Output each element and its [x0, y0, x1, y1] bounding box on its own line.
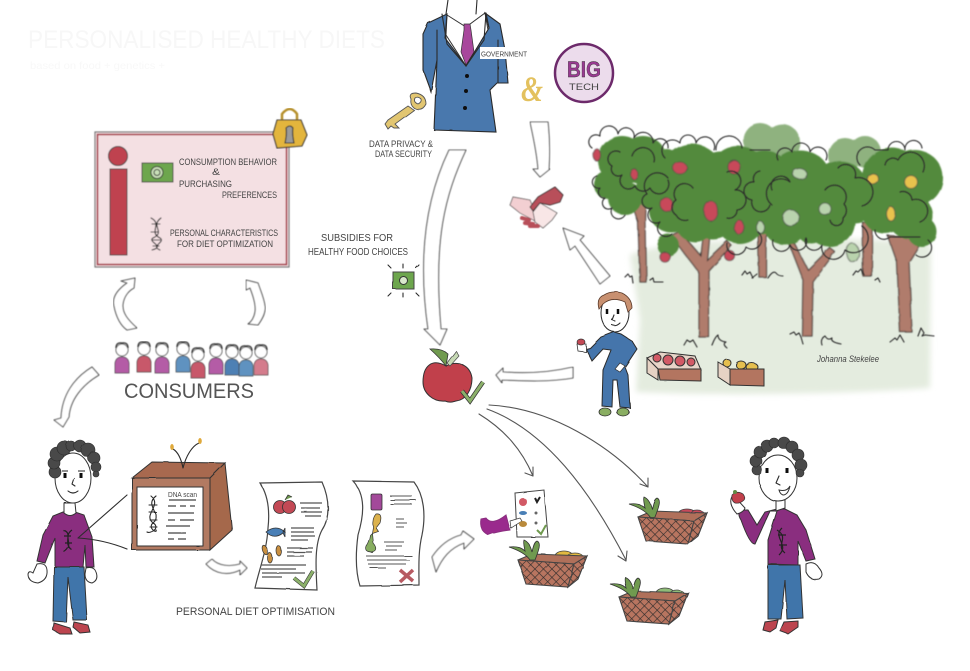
crowd — [115, 342, 268, 378]
text lines — [261, 503, 322, 577]
canopies and trunks — [594, 123, 943, 337]
icon: key — [385, 93, 426, 129]
group: consumers — [115, 342, 268, 403]
card text: PURCHASING — [179, 179, 232, 189]
tree outlines and grass — [589, 126, 934, 348]
arrow: documents to shopping — [432, 531, 474, 572]
label: government — [480, 47, 529, 59]
arrow: government to handshake — [530, 122, 550, 177]
badge: big tech — [555, 44, 613, 102]
card text — [170, 157, 278, 249]
icon: handshake — [510, 187, 563, 228]
icon: padlock — [273, 109, 307, 148]
orchard background and trees — [594, 123, 943, 394]
consumers label: CONSUMERS — [124, 380, 254, 403]
label: dna scan: DNA scan — [168, 490, 197, 499]
icon: apple with check — [423, 349, 483, 402]
check mark — [294, 571, 313, 586]
card text: PERSONAL CHARACTERISTICS — [170, 228, 278, 238]
arrow: farmer to handshake — [563, 228, 610, 284]
hand holding shopping list — [481, 490, 548, 537]
signature: Johanna Stekelee — [816, 354, 879, 364]
label: subsidies — [308, 233, 408, 258]
back canopies — [743, 123, 881, 172]
arrow: card right — [246, 280, 265, 325]
arrow to list — [479, 414, 533, 476]
document: recommended foods — [255, 482, 328, 590]
label: data privacy: DATA PRIVACY & — [369, 139, 433, 149]
crates of fruit — [647, 352, 764, 386]
icon: subsidy banknote — [388, 264, 419, 297]
text lines — [366, 496, 416, 568]
label: subsidies: HEALTHY FOOD CHOICES — [308, 247, 408, 258]
arrow: box to diet sheet — [206, 559, 247, 575]
arrow to green basket — [487, 409, 627, 561]
card text: CONSUMPTION BEHAVIOR — [179, 157, 277, 167]
label: personal diet optimisation: PERSONAL DIET OPTIMISATION — [176, 606, 335, 618]
thin arrows from apple to shopping — [479, 405, 648, 561]
faint title: based on food + genetics + — [30, 61, 165, 72]
icon: ampersand: & — [521, 69, 543, 109]
foliage — [594, 136, 943, 256]
basket with yellow produce — [509, 540, 587, 587]
label: government: GOVERNMENT — [481, 50, 527, 58]
apple — [274, 495, 296, 514]
DNA icon — [151, 218, 161, 250]
figure: person with dna sweater — [28, 440, 101, 634]
figure: government suit — [423, 0, 508, 132]
fish — [266, 528, 285, 537]
banknote icon — [142, 163, 173, 182]
fruit — [594, 149, 918, 262]
trunks — [629, 195, 924, 337]
info card — [95, 132, 289, 267]
badge: big tech: TECH — [569, 82, 599, 93]
card text: PREFERENCES — [222, 190, 277, 200]
label: subsidies: SUBSIDIES FOR — [321, 233, 393, 244]
crate: apples — [647, 352, 701, 381]
arrow: farmer to apple — [496, 367, 573, 383]
faint title: PERSONALISED HEALTHY DIETS — [28, 26, 385, 54]
pear — [366, 533, 376, 552]
basket with red produce — [629, 497, 707, 544]
badge: big tech: BIG — [567, 57, 601, 82]
jar — [371, 494, 382, 510]
card text: & — [212, 167, 220, 177]
dna analysis box — [132, 438, 232, 550]
label: data privacy — [369, 139, 433, 159]
card text: FOR DIET OPTIMIZATION — [177, 239, 273, 249]
faint title — [28, 26, 385, 72]
arrow: government to apple — [424, 150, 466, 345]
legumes — [261, 544, 282, 563]
pointer lines to dna box — [78, 495, 127, 549]
ground — [630, 238, 931, 394]
x mark — [400, 570, 413, 582]
letter i icon — [108, 146, 128, 255]
label: data privacy: DATA SECURITY — [375, 149, 432, 159]
drumstick — [372, 514, 381, 533]
arrow to red basket — [489, 405, 648, 487]
figure: farmer — [577, 292, 637, 416]
document: foods to avoid — [353, 481, 424, 586]
arrow: consumers to person — [54, 367, 99, 427]
crate: pears — [718, 359, 764, 386]
figure: happy person with apple — [731, 437, 822, 634]
arrow: card left — [114, 278, 137, 330]
basket with green produce — [610, 577, 688, 624]
